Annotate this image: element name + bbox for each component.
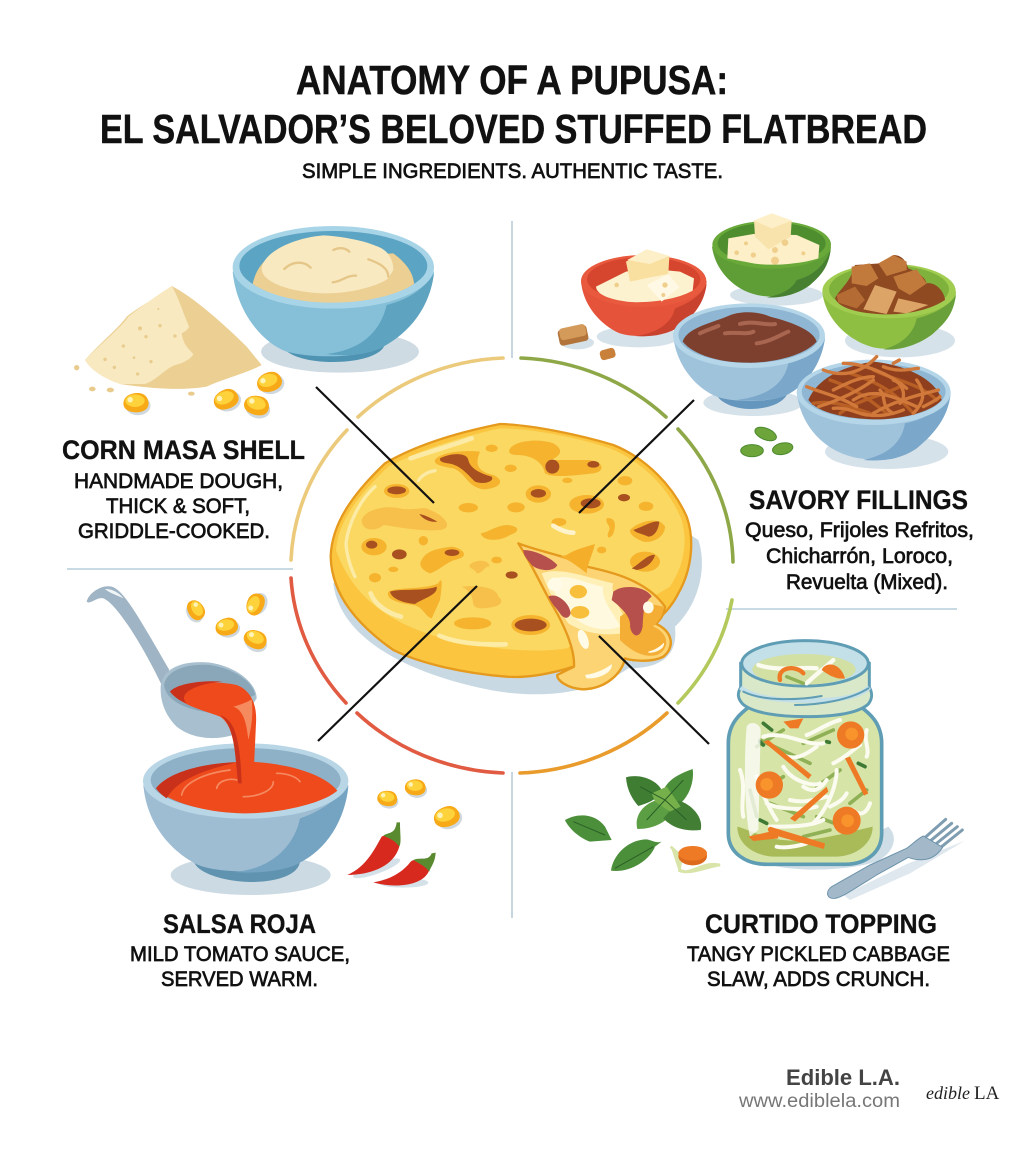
melted filling inside the cut bbox=[518, 543, 671, 689]
carrot slice and cabbage bbox=[671, 846, 720, 872]
green bowl with cheese cubes bbox=[712, 213, 831, 306]
footer credit bbox=[738, 1065, 900, 1112]
illustration: curtido jar, herbs and fork bbox=[565, 641, 965, 900]
logo: edible LA: LA bbox=[974, 1083, 1000, 1104]
footer credit: www.ediblela.com bbox=[738, 1091, 900, 1112]
label: corn masa shell: THICK & SOFT, bbox=[106, 495, 250, 518]
logo: edible LA: edible bbox=[926, 1083, 970, 1103]
quadrant dividers bbox=[67, 221, 957, 918]
herb leaves bbox=[565, 769, 701, 871]
illustration: salsa bowl, ladle, corn and chilies bbox=[87, 586, 465, 895]
corn kernels bbox=[123, 369, 287, 421]
label: corn masa shell bbox=[62, 435, 305, 543]
label: savory fillings: Chicharrón, Loroco, bbox=[766, 545, 953, 568]
lime bowl with chicharron bbox=[822, 255, 956, 357]
blue bowl with refried beans bbox=[673, 303, 825, 416]
illustration: savory filling bowls bbox=[557, 213, 956, 469]
leader lines bbox=[316, 387, 709, 744]
salsa bowl bbox=[143, 743, 348, 882]
label: corn masa shell: HANDMADE DOUGH, bbox=[74, 470, 283, 493]
illustration: masa bowl, flour pile and corn bbox=[74, 226, 434, 421]
fork bbox=[828, 819, 965, 900]
label: salsa roja: SERVED WARM. bbox=[161, 968, 318, 991]
bowl shadow bbox=[171, 855, 331, 895]
pupusa body bbox=[331, 424, 691, 689]
bowl shadow bbox=[261, 331, 419, 373]
label: corn masa shell: GRIDDLE-COOKED. bbox=[78, 520, 270, 543]
ladle bbox=[87, 586, 257, 738]
loroco buds bbox=[741, 424, 794, 457]
pouring salsa bbox=[170, 682, 256, 783]
jar neck and rim bbox=[738, 641, 872, 717]
subtitle: SIMPLE INGREDIENTS. AUTHENTIC TASTE. bbox=[302, 160, 723, 183]
corn kernels bbox=[182, 589, 465, 833]
jar shadow bbox=[730, 827, 894, 870]
flour pile bbox=[85, 286, 262, 389]
red bowl with queso bbox=[581, 249, 707, 347]
label: savory fillings bbox=[745, 485, 974, 594]
label: salsa roja: SALSA ROJA bbox=[163, 909, 316, 939]
masa dough bbox=[253, 253, 414, 303]
blue bowl with shredded pork bbox=[797, 357, 951, 469]
title: ANATOMY OF A PUPUSA: bbox=[296, 57, 728, 103]
ring: colored segments around pupusa bbox=[291, 358, 733, 773]
salsa in bowl bbox=[156, 762, 337, 813]
label: salsa roja: MILD TOMATO SAUCE, bbox=[130, 943, 350, 966]
label: savory fillings: SAVORY FILLINGS bbox=[749, 485, 968, 515]
label: salsa roja bbox=[130, 909, 350, 991]
red chilies bbox=[347, 822, 436, 888]
pupusa centerpiece bbox=[331, 424, 702, 694]
title bbox=[100, 57, 927, 152]
chicharron crumbs bbox=[557, 323, 616, 361]
pupusa highlights bbox=[346, 438, 573, 644]
pupusa browned spots bbox=[361, 441, 665, 635]
label: curtido topping: CURTIDO TOPPING bbox=[705, 909, 937, 939]
label: curtido topping bbox=[687, 909, 950, 991]
jar body with slaw bbox=[728, 705, 882, 864]
label: savory fillings: Revuelta (Mixed). bbox=[786, 571, 948, 594]
bowl foot bbox=[282, 343, 385, 362]
label: savory fillings: Queso, Frijoles Refritos, bbox=[745, 519, 974, 542]
footer credit: Edible L.A. bbox=[786, 1065, 900, 1090]
label: curtido topping: SLAW, ADDS CRUNCH. bbox=[707, 968, 930, 991]
pupusa top surface bbox=[336, 428, 685, 651]
blue bowl bbox=[233, 272, 434, 356]
label: corn masa shell: CORN MASA SHELL bbox=[62, 435, 305, 465]
pupusa shadow bbox=[333, 510, 702, 694]
label: curtido topping: TANGY PICKLED CABBAGE bbox=[687, 943, 950, 966]
